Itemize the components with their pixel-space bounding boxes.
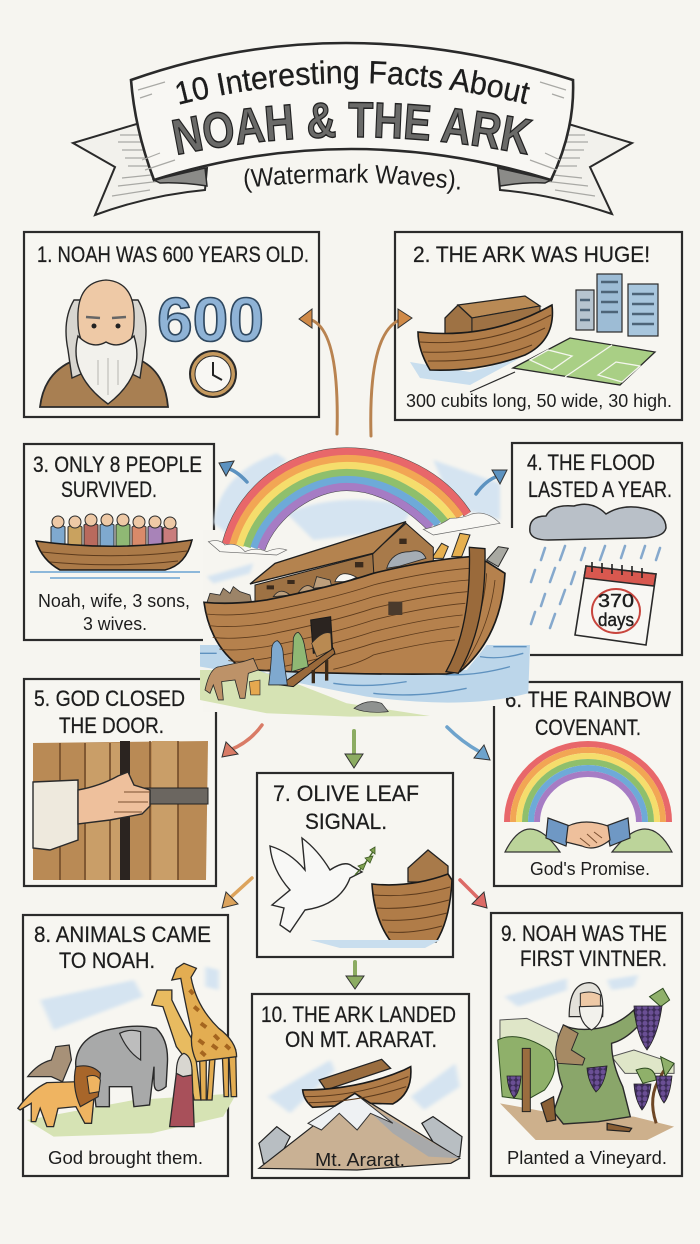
- heading 5: 5. GOD CLOSED: [34, 686, 185, 711]
- sky wash: [504, 975, 638, 1007]
- arrow heads: [219, 309, 507, 989]
- vines left: [498, 1037, 555, 1100]
- number 600: 600: [157, 286, 264, 355]
- heading 2: 2. THE ARK WAS HUGE!: [413, 242, 650, 267]
- panel 1 frame: [24, 232, 319, 417]
- Noah head: [569, 983, 603, 1017]
- icon: soccer field: [513, 338, 655, 385]
- ark window: [388, 602, 402, 615]
- title line two: NOAH & THE ARK: [172, 102, 534, 156]
- grapes raised: [634, 1006, 662, 1050]
- panel: fact 5: THE DOOR.: [59, 713, 164, 738]
- panel: fact 8: [18, 915, 237, 1176]
- icon: rain cloud: [530, 504, 666, 540]
- Noah figure: [170, 1070, 194, 1127]
- arrow to fact 3: [226, 468, 247, 482]
- heading 4: 4. THE FLOOD: [527, 450, 655, 475]
- panel 8 frame: [23, 915, 228, 1176]
- sky wash: [268, 1060, 460, 1113]
- icon: Noah portrait: [40, 280, 168, 407]
- panel 10 frame: [252, 994, 469, 1178]
- arrow to fact 2: [371, 319, 402, 436]
- calendar value: 370: [598, 591, 634, 611]
- arrow group: flow connectors: [226, 319, 498, 980]
- vine right: [653, 1063, 672, 1123]
- icon: animals illustration: [18, 963, 237, 1137]
- ark hull: [204, 557, 505, 674]
- horse: [205, 658, 258, 700]
- icon: ark in water: [310, 850, 452, 948]
- grass: [27, 1093, 237, 1137]
- panel: fact 8: TO NOAH.: [59, 948, 155, 973]
- panel: fact 7: SIGNAL.: [305, 809, 387, 834]
- panel: fact 3: [24, 444, 214, 640]
- caption 6: God's Promise.: [530, 859, 650, 879]
- arrow to fact 8: [230, 878, 252, 898]
- panel 5 frame: [24, 679, 216, 886]
- arrow to fact 7: [352, 731, 356, 758]
- figures on ramp: [269, 641, 287, 685]
- icon: rain drops: [531, 546, 660, 628]
- icon: clock: [190, 351, 236, 397]
- giraffe front: [172, 963, 237, 1100]
- banner right tail: [498, 123, 632, 214]
- ark on peak: [319, 1059, 391, 1090]
- shore: [200, 670, 430, 717]
- panel 2 frame: [395, 232, 682, 420]
- panel: fact 6: COVENANT.: [535, 715, 641, 740]
- heading 3: 3. ONLY 8 PEOPLE: [33, 452, 202, 477]
- main mountain: [259, 1093, 460, 1170]
- panel: fact 10: ON MT. ARARAT.: [285, 1027, 437, 1052]
- arrow to fact 1: [308, 319, 337, 434]
- panel 4 frame: [512, 443, 682, 655]
- ark door: [311, 617, 333, 653]
- panel 6 frame: [494, 682, 682, 886]
- icon: water under ark: [410, 358, 520, 385]
- title line one: 10 Interesting Facts About: [176, 60, 530, 104]
- panel: fact 4: LASTED A YEAR.: [528, 477, 672, 502]
- arrow to fact 6: [447, 727, 480, 752]
- arrow to fact 5: [230, 725, 262, 750]
- central ark illustration: [200, 452, 530, 717]
- heading 7: 7. OLIVE LEAF: [273, 781, 419, 806]
- panel: fact 3: SURVIVED.: [61, 477, 157, 502]
- icon: ark on mountain: [259, 1059, 462, 1170]
- panel: fact 10: [252, 994, 469, 1178]
- icon: Noah in vineyard: [498, 975, 674, 1140]
- ramp: [280, 648, 335, 687]
- arrow: length dimension: [470, 372, 515, 392]
- caption 2: 300 cubits long, 50 wide, 30 high.: [406, 391, 672, 411]
- panel 7 frame: [257, 773, 453, 957]
- icon: wooden door: [33, 741, 208, 880]
- panel: fact 7: [257, 773, 453, 957]
- icon: hand and sleeve: [33, 772, 150, 850]
- prow post: [446, 547, 485, 673]
- arrow to fact 10: [353, 962, 357, 980]
- heading 9: 9. NOAH WAS THE: [501, 921, 667, 946]
- elephant: [76, 1026, 168, 1107]
- clouds: [208, 513, 500, 555]
- banner left tail: [73, 123, 207, 215]
- grape leaf: [650, 988, 670, 1007]
- sky wash: [40, 967, 219, 1030]
- heading 1: 1. NOAH WAS 600 YEARS OLD.: [37, 242, 309, 267]
- icon: calendar: [575, 562, 656, 645]
- caption 8: God brought them.: [48, 1148, 203, 1168]
- sandals: [541, 1097, 632, 1132]
- arrow to fact 9: [460, 880, 478, 898]
- panel: fact 2: [395, 232, 682, 420]
- Noah robe: [554, 1010, 637, 1124]
- animals on board: [273, 577, 332, 597]
- hull planks: [206, 568, 495, 670]
- brown animal: [28, 1045, 71, 1082]
- heading 10: 10. THE ARK LANDED: [261, 1002, 456, 1027]
- panel: fact 4: [512, 443, 682, 655]
- panel 9 frame: [491, 913, 682, 1176]
- grapes right: [634, 1076, 672, 1110]
- panel: fact 9: FIRST VINTNER.: [520, 946, 667, 971]
- panel: fact 3: 3 wives.: [83, 614, 147, 634]
- lion: [18, 1082, 94, 1127]
- rock: [354, 702, 388, 712]
- panel: fact 6: [494, 682, 682, 886]
- caption 10: Mt. Ararat.: [315, 1150, 405, 1170]
- banner main ribbon: [131, 43, 573, 180]
- icon: ark: [418, 296, 552, 370]
- icon: handshake: [546, 818, 630, 848]
- cabin roof: [250, 522, 406, 584]
- panel: fact 1: [24, 232, 319, 417]
- soil: [500, 1103, 674, 1140]
- giraffes and goat: [432, 533, 470, 558]
- icon: buildings: [576, 274, 658, 336]
- subtitle: (Watermark Waves).: [244, 164, 460, 194]
- cabin gable: [373, 523, 433, 577]
- panel: fact 5: [24, 679, 216, 886]
- side peaks: [259, 1117, 462, 1163]
- giraffe back: [152, 990, 201, 1100]
- title banner: [70, 42, 634, 217]
- icon: rainbow: [507, 744, 669, 822]
- animals on deck: [207, 587, 252, 603]
- icon: calendar: days: [598, 610, 634, 630]
- icon: dove: [270, 838, 375, 932]
- caption 3: Noah, wife, 3 sons,: [38, 591, 190, 611]
- grapes in hand: [587, 1066, 607, 1092]
- heading 8: 8. ANIMALS CAME: [34, 922, 211, 947]
- water: [200, 645, 530, 703]
- hills: [500, 1018, 558, 1060]
- icon: people in boat: [30, 514, 200, 578]
- sky wash: [207, 453, 500, 583]
- small animal: [249, 680, 260, 695]
- banner folds: [154, 168, 551, 186]
- panel: fact 9: [491, 913, 682, 1176]
- heading 6: 6. THE RAINBOW: [505, 687, 671, 712]
- icon: hills: [505, 829, 672, 852]
- arrow to fact 4: [476, 476, 498, 494]
- panel 3 frame: [24, 444, 214, 640]
- rainbow: [226, 452, 467, 549]
- cabin wall: [255, 554, 374, 603]
- caption 9: Planted a Vineyard.: [507, 1148, 667, 1168]
- grapes left: [507, 1076, 521, 1098]
